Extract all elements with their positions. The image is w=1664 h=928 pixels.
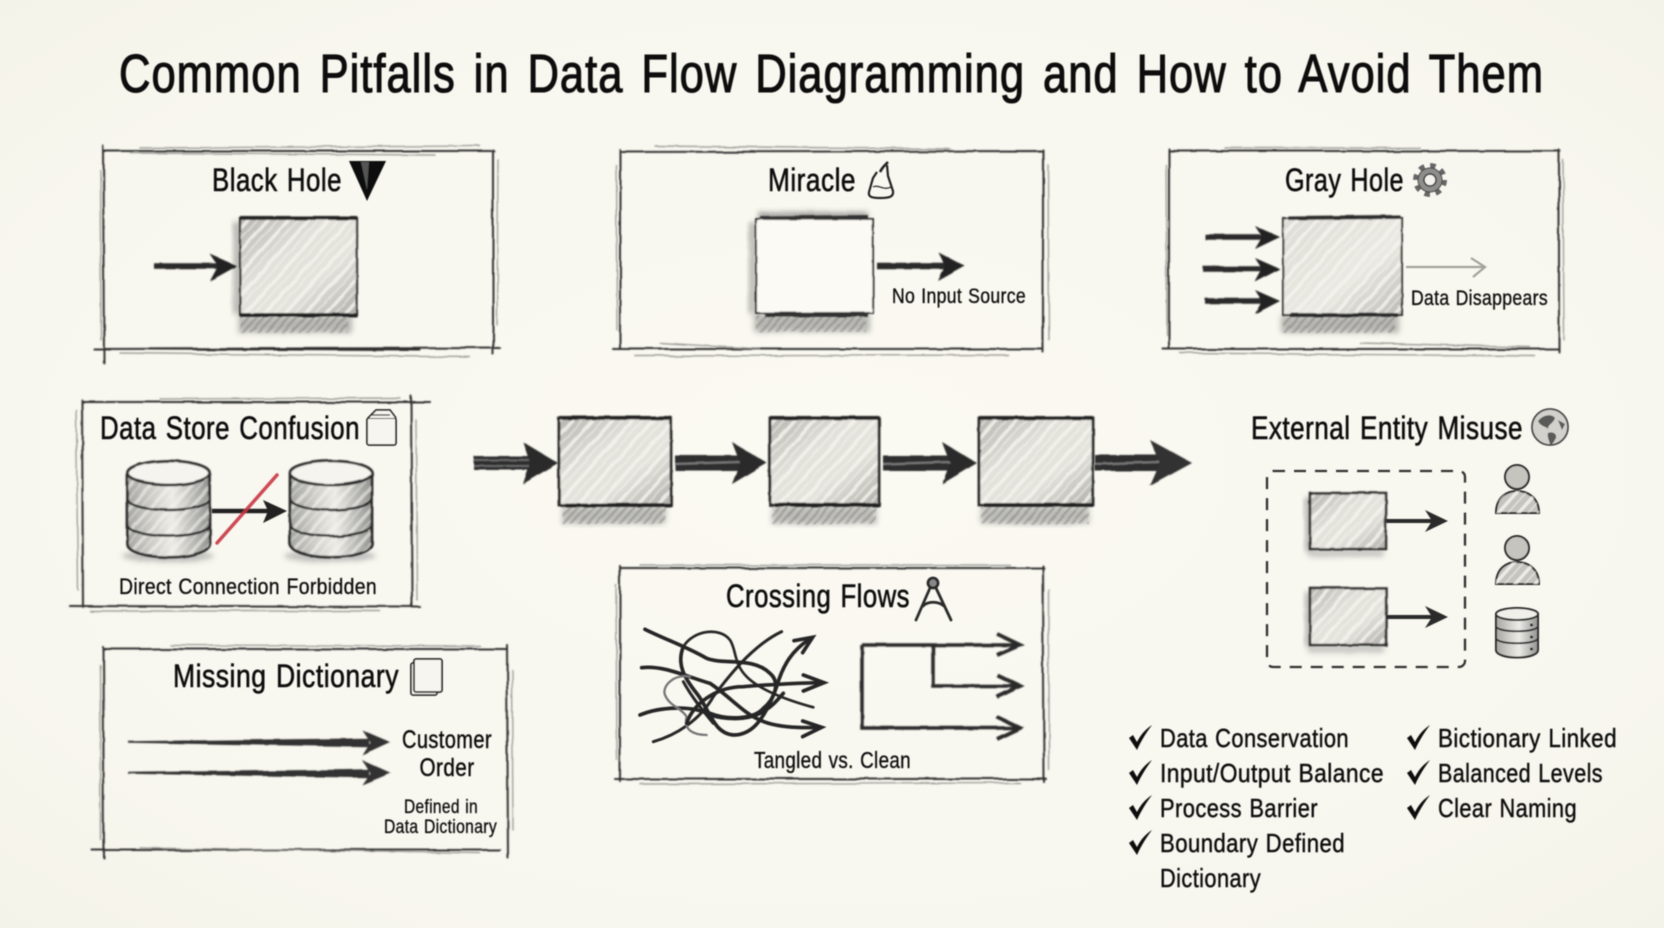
check item: boundary defined dictionary xyxy=(1129,828,1345,893)
icon: globe xyxy=(1532,409,1568,445)
process box, empty xyxy=(749,212,873,332)
check item: boundary defined dictionary: Boundary Defined xyxy=(1160,828,1345,858)
panel: data store confusion xyxy=(70,396,430,611)
panel: crossing flows xyxy=(615,565,1049,784)
check item: boundary defined dictionary: Dictionary xyxy=(1160,863,1261,893)
output arrow xyxy=(877,252,965,281)
heading: black hole: Black Hole xyxy=(212,162,342,198)
checklist: right column xyxy=(1407,723,1617,823)
two flow arrows xyxy=(128,730,391,785)
panel: miracle xyxy=(613,146,1049,356)
data store cylinder right xyxy=(284,461,376,562)
icon: box xyxy=(367,410,396,445)
panel: missing dictionary xyxy=(92,645,513,858)
icon: black funnel xyxy=(349,161,386,201)
icon: person one xyxy=(1496,465,1539,513)
labels: defined in data dictionary xyxy=(384,797,497,838)
labels: customer order: Customer xyxy=(402,726,492,754)
process box, shaded light xyxy=(1281,217,1402,333)
dashed system boundary xyxy=(1267,471,1465,667)
flow arrow two xyxy=(675,442,767,484)
check item: process barrier: Process Barrier xyxy=(1160,793,1318,823)
process box, shaded xyxy=(233,218,357,333)
heading: crossing flows: Crossing Flows xyxy=(726,578,910,614)
heading: external entity misuse: External Entity Misuse xyxy=(1251,410,1523,446)
process box lower xyxy=(1305,588,1386,653)
clean orthogonal flows xyxy=(862,634,1020,739)
panel: external entity misuse xyxy=(1251,409,1568,667)
process box upper xyxy=(1305,493,1386,557)
arrow lower xyxy=(1386,606,1448,628)
icon: gear xyxy=(1416,166,1444,194)
icon: data store xyxy=(1496,608,1538,658)
arrow upper xyxy=(1386,510,1448,532)
check item: data conservation: Data Conservation xyxy=(1160,723,1349,753)
icon: person two xyxy=(1496,536,1539,584)
label: tangled vs clean: Tangled vs. Clean xyxy=(754,747,911,773)
labels: customer order: Order xyxy=(420,754,474,782)
connecting arrow xyxy=(212,500,287,523)
heading: gray hole: Gray Hole xyxy=(1285,162,1404,198)
heading: data store confusion: Data Store Confusion xyxy=(100,410,360,446)
red forbidden slash xyxy=(217,475,277,543)
icon: drafting compass xyxy=(916,578,951,620)
check item: balanced levels: Balanced Levels xyxy=(1438,758,1603,788)
process box three xyxy=(979,418,1093,524)
flow arrow four xyxy=(1095,440,1192,486)
faint output arrow xyxy=(1406,258,1485,277)
flow arrow three xyxy=(883,442,977,484)
label: data disappears: Data Disappears xyxy=(1411,287,1548,310)
icon: document stack xyxy=(411,659,442,695)
checklist: left column xyxy=(1129,723,1384,893)
tangled flows xyxy=(640,629,824,742)
labels: defined in data dictionary: Defined in xyxy=(404,797,478,818)
panel: gray hole xyxy=(1163,148,1564,356)
label: direct connection forbidden: Direct Connection Forbidden xyxy=(119,574,377,599)
central process flow xyxy=(474,418,1192,524)
process box two xyxy=(770,418,879,524)
heading: miracle: Miracle xyxy=(768,162,856,198)
input arrow xyxy=(154,254,237,281)
check item: clear naming: Clear Naming xyxy=(1438,793,1577,823)
heading: missing dictionary: Missing Dictionary xyxy=(173,658,399,694)
flow arrow one xyxy=(474,442,558,484)
three input arrows xyxy=(1203,226,1280,314)
check item: input/output balance: Input/Output Balance xyxy=(1160,758,1384,788)
process box one xyxy=(559,418,671,524)
label: no input source: No Input Source xyxy=(892,285,1026,308)
data store cylinder left xyxy=(122,461,214,562)
labels: customer order xyxy=(402,726,492,782)
icon: flask xyxy=(869,162,893,198)
panel: black hole xyxy=(94,146,500,363)
check item: bictionary linked: Bictionary Linked xyxy=(1438,723,1617,753)
labels: defined in data dictionary: Data Dictionary xyxy=(384,817,497,838)
